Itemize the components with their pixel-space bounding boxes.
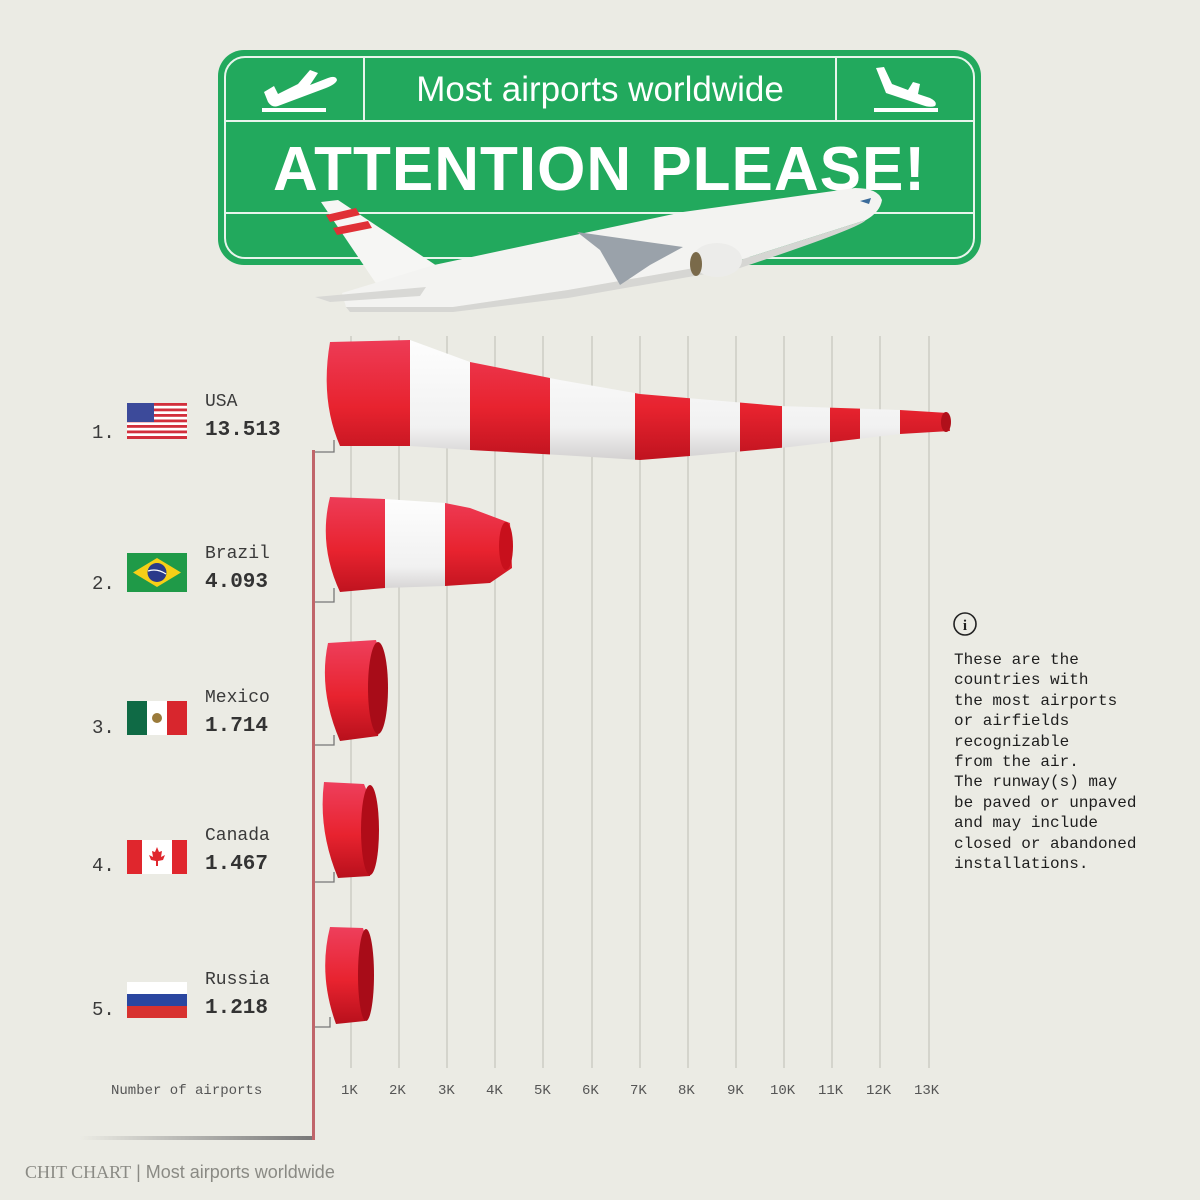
axis ticks: 3K bbox=[438, 1083, 455, 1099]
info text: These are the countries with the most airports or airfields recognizable from the air. The runway(s) may be paved or unpaved and may include closed or abandoned installations. bbox=[954, 651, 1136, 873]
info icon bbox=[954, 613, 976, 635]
axis ticks: 4K bbox=[486, 1083, 503, 1099]
windsock: Mexico bbox=[325, 640, 388, 741]
axis ticks bbox=[341, 1083, 939, 1099]
flag: USA bbox=[127, 403, 187, 439]
grid lines bbox=[351, 336, 929, 1068]
axis ticks: 1K bbox=[341, 1083, 358, 1099]
wing bbox=[577, 232, 683, 285]
row 4: Canada: Canada bbox=[205, 826, 270, 846]
airplane bbox=[316, 188, 882, 312]
axis ticks: 11K bbox=[818, 1083, 843, 1099]
axis ticks: 2K bbox=[389, 1083, 406, 1099]
row 5: Russia: Russia bbox=[205, 970, 270, 990]
row 3: Mexico: 3. bbox=[92, 717, 115, 739]
title sign bbox=[218, 50, 981, 265]
windsock: USA bbox=[326, 340, 950, 460]
windsock: Brazil bbox=[326, 497, 512, 592]
flag: Brazil bbox=[127, 553, 187, 592]
pole bbox=[80, 440, 334, 1140]
icon: departure bbox=[262, 70, 337, 112]
info icon: i bbox=[963, 618, 967, 634]
row 3: Mexico: Mexico bbox=[205, 688, 270, 708]
row 4: Canada bbox=[92, 826, 270, 877]
row 3: Mexico: 1.714 bbox=[205, 715, 268, 738]
row 4: Canada: 4. bbox=[92, 855, 115, 877]
flag: Mexico bbox=[127, 701, 187, 735]
axis ticks: 12K bbox=[866, 1083, 891, 1099]
heading: ATTENTION PLEASE! bbox=[273, 135, 926, 204]
row 2: Brazil: 2. bbox=[92, 573, 115, 595]
row 2: Brazil bbox=[92, 544, 270, 595]
axis ticks: 7K bbox=[630, 1083, 647, 1099]
windsock: Canada bbox=[323, 782, 379, 878]
axis ticks: 10K bbox=[770, 1083, 795, 1099]
icon: arrival bbox=[874, 67, 938, 112]
chart svg bbox=[96, 336, 977, 1140]
row 1: USA: 1. bbox=[92, 422, 115, 444]
row 1: USA bbox=[92, 392, 281, 444]
row 5: Russia: 5. bbox=[92, 999, 115, 1021]
axis ticks: 8K bbox=[678, 1083, 695, 1099]
stabilizer bbox=[315, 287, 426, 302]
flag: Canada bbox=[127, 840, 187, 874]
axis ticks: 5K bbox=[534, 1083, 551, 1099]
axis ticks: 6K bbox=[582, 1083, 599, 1099]
axis ticks: 9K bbox=[727, 1083, 744, 1099]
row 1: USA: USA bbox=[205, 392, 237, 412]
flag: Russia bbox=[127, 982, 187, 1018]
axis ticks: 13K bbox=[914, 1083, 939, 1099]
fuselage bbox=[342, 188, 882, 307]
footer: CHIT CHART | Most airports worldwide bbox=[25, 1162, 335, 1182]
row 3: Mexico bbox=[92, 688, 270, 739]
row 2: Brazil: 4.093 bbox=[205, 571, 268, 594]
tail fin bbox=[321, 200, 440, 285]
row 4: Canada: 1.467 bbox=[205, 853, 268, 876]
axis label: Number of airports bbox=[111, 1083, 262, 1099]
row 5: Russia bbox=[92, 970, 270, 1021]
engine bbox=[692, 243, 742, 277]
windsock: Russia bbox=[325, 927, 374, 1024]
row 2: Brazil: Brazil bbox=[205, 544, 270, 564]
subtitle: Most airports worldwide bbox=[416, 70, 784, 109]
row 1: USA: 13.513 bbox=[205, 419, 281, 442]
row 5: Russia: 1.218 bbox=[205, 997, 268, 1020]
